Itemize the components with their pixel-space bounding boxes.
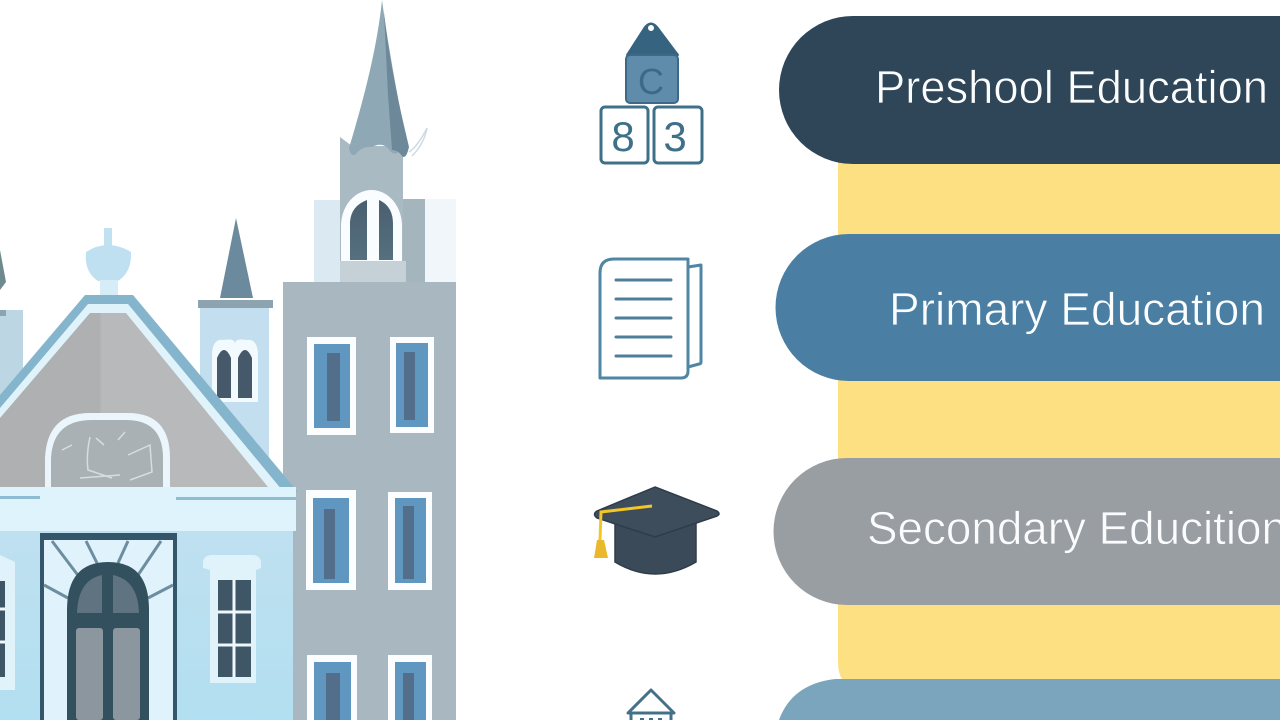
grey tower block [283, 282, 456, 720]
label: secondary: Secondary Educition [867, 502, 1280, 554]
label: primary: Primary Education [889, 283, 1265, 335]
window [307, 337, 356, 435]
icon: school house [628, 690, 674, 720]
urn finial [86, 228, 131, 296]
illustration: school building [0, 0, 456, 720]
small turret [198, 218, 273, 466]
level 1: preschool education [601, 16, 1280, 164]
tower arched window [340, 190, 406, 282]
yellow backing column [838, 100, 1280, 685]
pill: primary [776, 234, 1280, 381]
window [388, 492, 432, 590]
icon: document [600, 259, 701, 378]
window [307, 655, 357, 720]
icon: alphabet blocks: C [638, 61, 664, 102]
level 2: primary education [600, 234, 1280, 381]
facade wall [0, 487, 296, 720]
main entrance door [40, 533, 177, 720]
pill: secondary [774, 458, 1280, 605]
facade window left [0, 555, 15, 690]
label: preschool: Preshool Education [875, 61, 1268, 113]
pill: cropped [779, 679, 1280, 720]
pill: preschool [779, 16, 1280, 164]
window [388, 655, 432, 720]
window [306, 490, 356, 590]
gable roof [0, 295, 298, 492]
icon: alphabet blocks: 8 [611, 113, 635, 160]
icon: alphabet blocks [601, 24, 702, 163]
main tower with spire [314, 0, 456, 282]
lunette panel [45, 413, 170, 489]
far left turret [0, 250, 23, 400]
facade window right [203, 555, 261, 683]
icon: graduation cap [594, 487, 719, 574]
level 3: secondary education [594, 458, 1280, 605]
icon: alphabet blocks: 3 [663, 113, 687, 160]
window [390, 337, 434, 433]
level 4: higher education (cropped) [628, 679, 1280, 720]
